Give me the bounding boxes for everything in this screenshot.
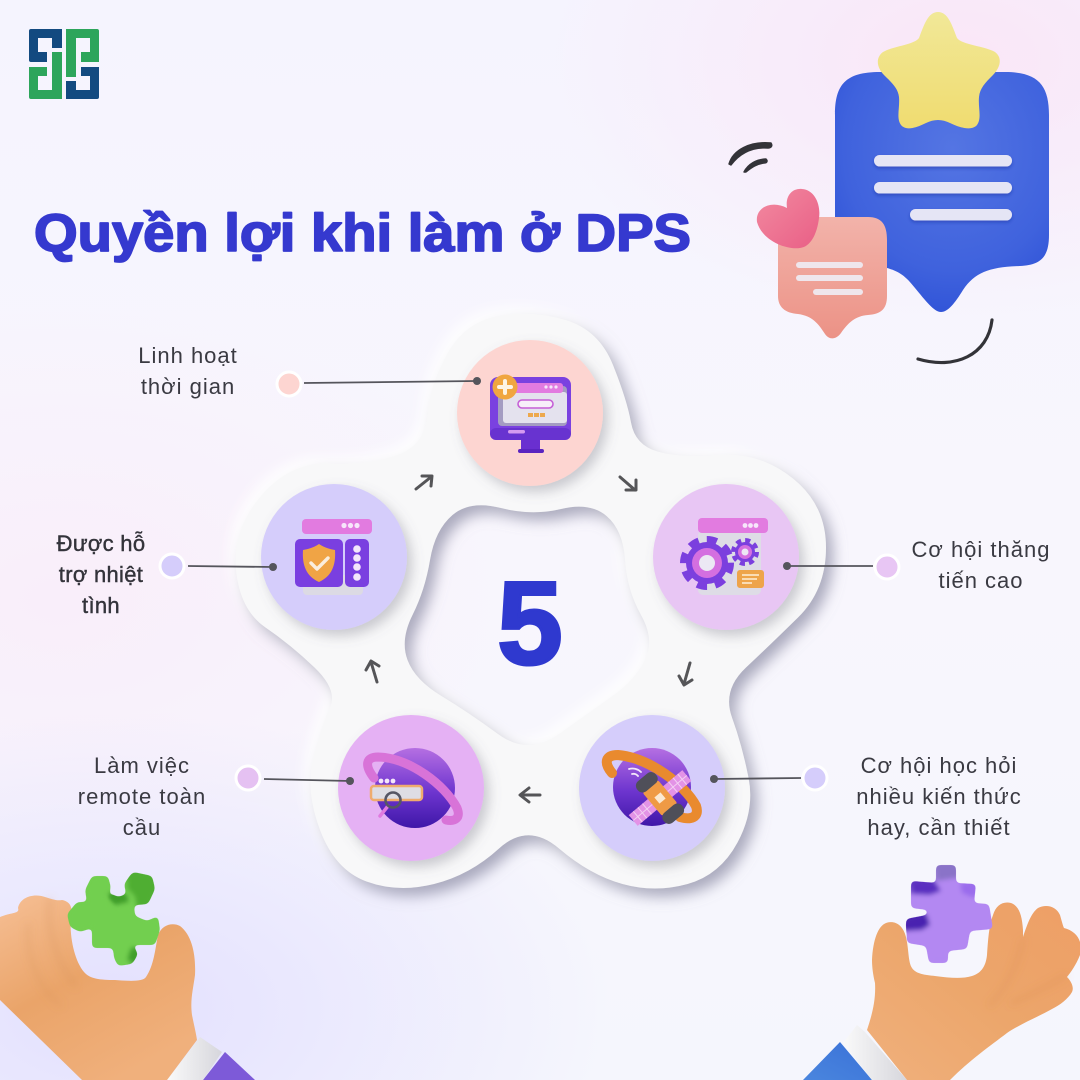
- icon: monitor: [490, 374, 571, 453]
- illustration: left hand holding green puzzle piece: [0, 872, 255, 1080]
- label: promotion: tiến cao: [938, 568, 1024, 593]
- illustration: right hand holding purple puzzle piece: [803, 865, 1080, 1080]
- connector: promotion: [783, 555, 899, 579]
- circle: left, support: [261, 484, 407, 630]
- arrow: step 3 to 4: [520, 788, 540, 802]
- label: flexible time: thời gian: [141, 374, 235, 399]
- logo: DPS: [29, 29, 99, 99]
- label: learning: hay, cần thiết: [867, 815, 1011, 840]
- icon: gears window: [684, 518, 768, 595]
- label: remote work: cầu: [123, 815, 161, 840]
- finger creases: [990, 940, 1065, 1005]
- icon: large blue speech bubble: [835, 72, 1049, 312]
- finger creases: [28, 900, 75, 1005]
- label: remote work: remote toàn: [78, 784, 206, 809]
- ring shape: [236, 314, 826, 888]
- cuff: [843, 1025, 907, 1080]
- connector: flexible time: [277, 372, 481, 396]
- icon: salmon speech bubble: [778, 217, 887, 338]
- label: learning: Cơ hội học hỏi: [861, 753, 1017, 778]
- illustration: speech bubbles with star and heart: [729, 12, 1049, 363]
- connector: learning: [710, 766, 827, 790]
- center number: 5: [497, 558, 563, 690]
- icon: green puzzle piece: [67, 872, 160, 966]
- arrow: step 5 to 1: [416, 476, 432, 489]
- icon: purple puzzle piece: [906, 865, 993, 963]
- sleeve: [803, 1042, 872, 1080]
- label: promotion: Cơ hội thăng: [912, 537, 1050, 562]
- title: Quyền lợi khi làm ở DPS: [34, 204, 691, 263]
- label: remote work: Làm việc: [94, 753, 190, 778]
- connector: support: [160, 554, 277, 578]
- circle: right, promotion: [653, 484, 799, 630]
- connector: remote work: [236, 766, 354, 790]
- circle: lower left, remote work: [338, 715, 484, 861]
- icon: bubble text lines: [874, 155, 1012, 220]
- label: support: tình: [82, 593, 120, 618]
- icon: yellow star: [878, 12, 1000, 128]
- arrow: step 1 to 2: [620, 477, 636, 490]
- panel: benefit ring: [236, 314, 826, 888]
- hand: [867, 902, 1080, 1080]
- sleeve: [203, 1052, 255, 1080]
- icon: curved stroke: [918, 320, 992, 363]
- label: support: Được hỗ: [57, 531, 145, 556]
- arrow: step 4 to 5: [366, 661, 379, 682]
- icon: planet with satellite: [607, 748, 704, 841]
- icon: salmon bubble text lines: [796, 262, 863, 295]
- label: support: trợ nhiệt: [59, 562, 143, 587]
- circle: lower right, learning: [579, 715, 725, 861]
- circle: top, flexible time: [457, 340, 603, 486]
- cuff: [167, 1037, 222, 1080]
- label: flexible time: Linh hoạt: [138, 343, 238, 368]
- icon: motion strokes: [729, 143, 772, 172]
- icon: heart: [757, 189, 819, 248]
- hand: [0, 895, 197, 1080]
- arrow: step 2 to 3: [679, 663, 692, 685]
- icon: shield window: [295, 519, 372, 595]
- icon: planet with search bar: [368, 748, 458, 828]
- label: learning: nhiều kiến thức: [856, 784, 1022, 809]
